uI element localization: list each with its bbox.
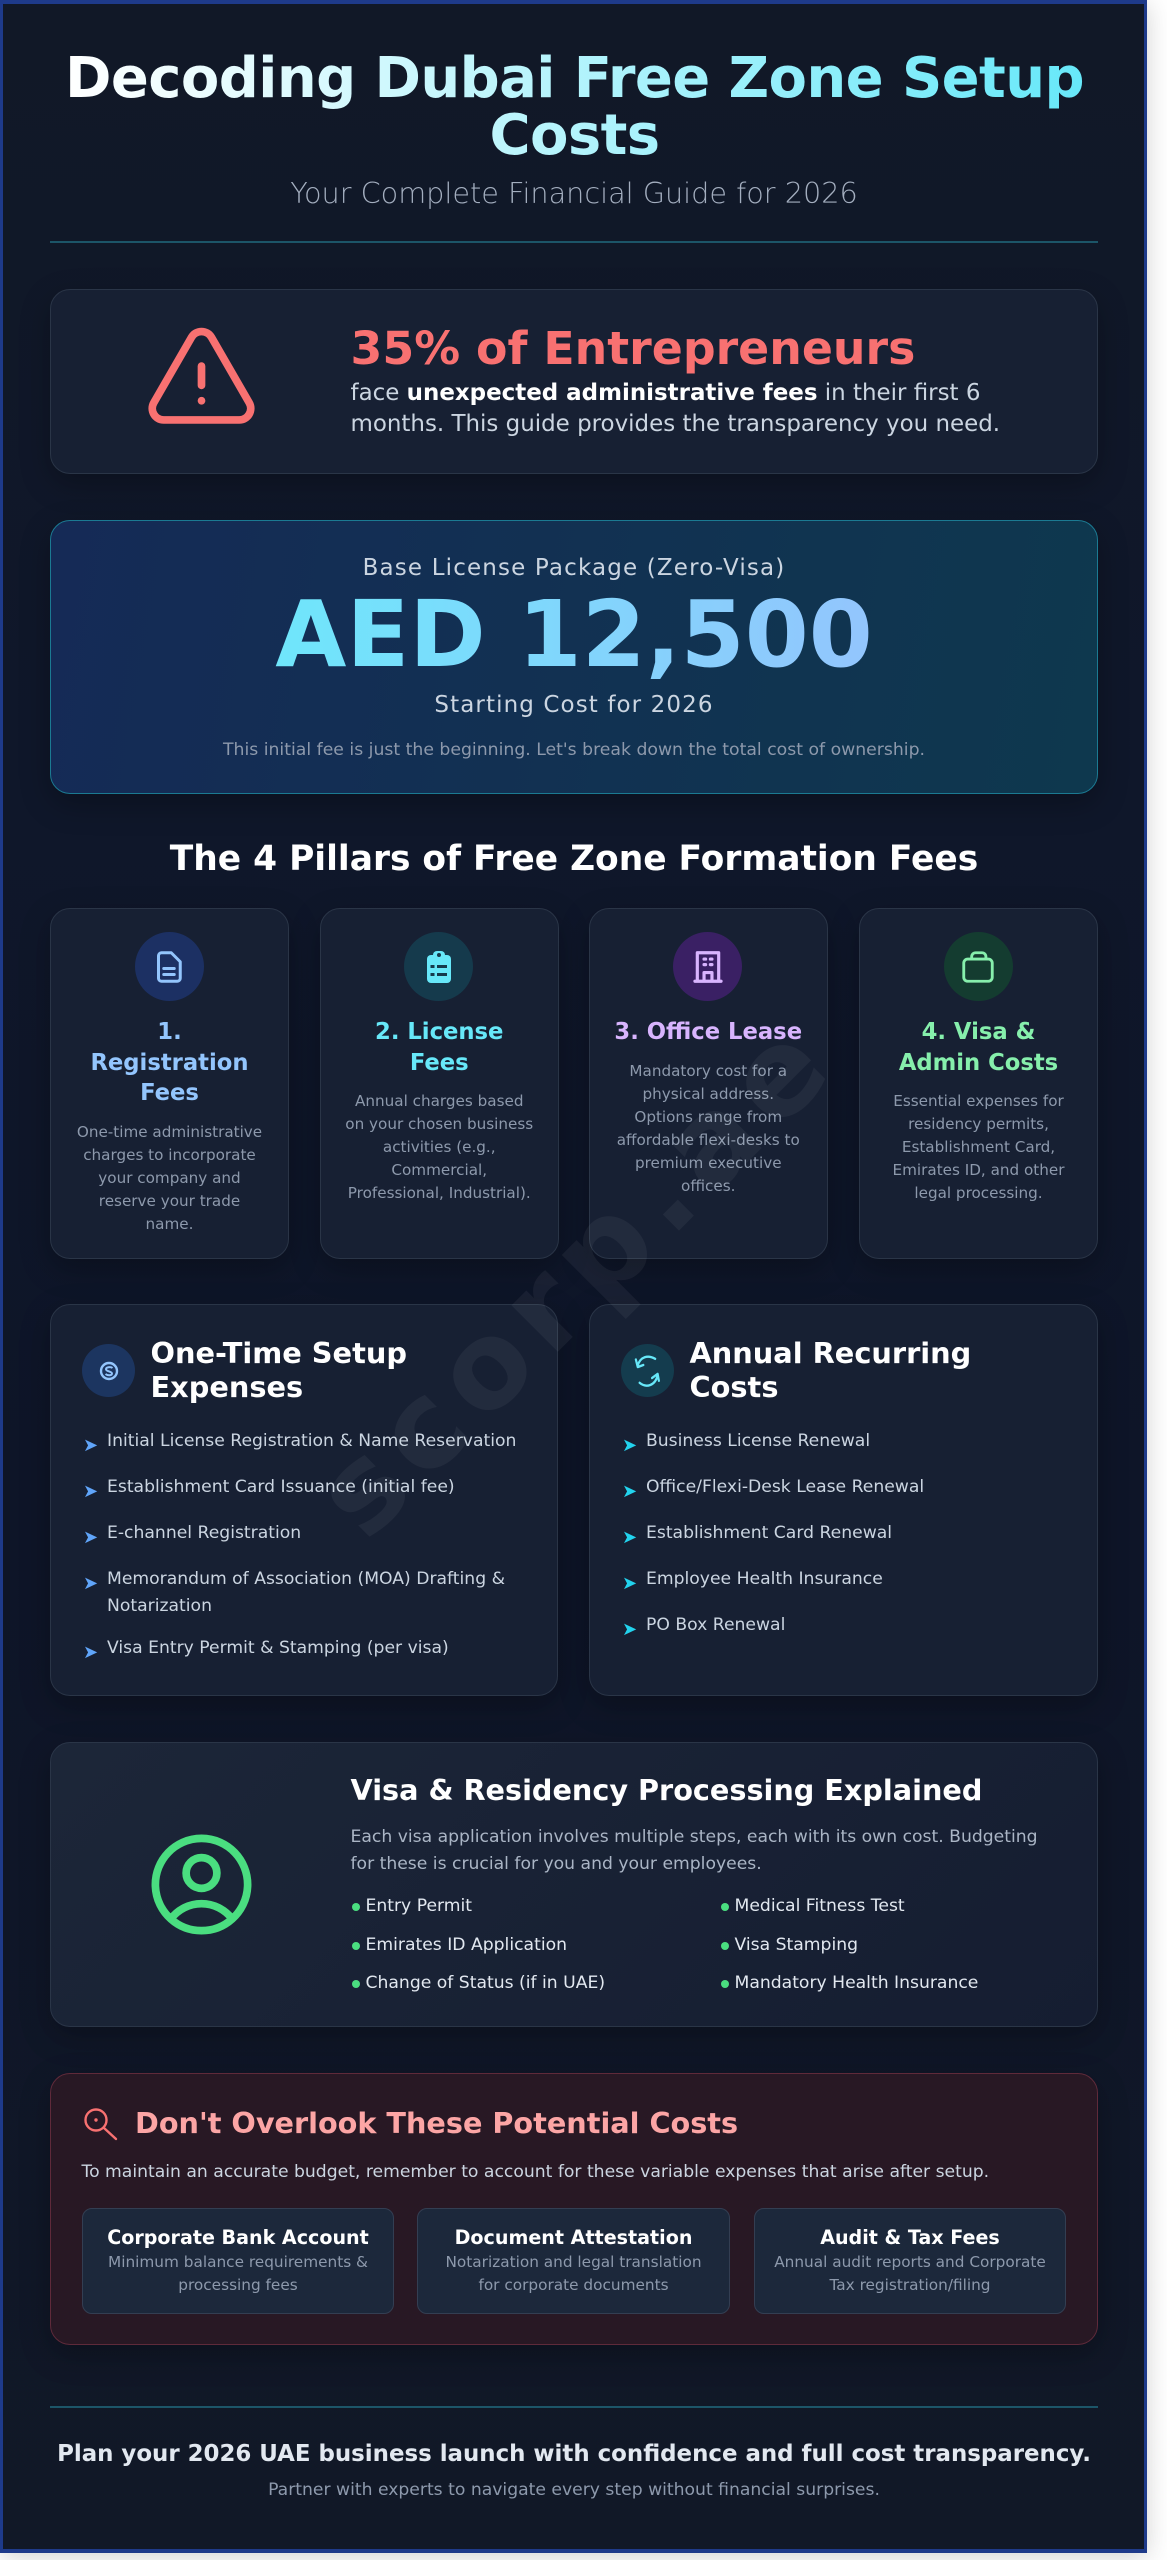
list: recurring items: ➤ [622, 1481, 637, 1502]
list: recurring items: Office/Flexi-Desk Lease Renewal [646, 1477, 924, 1497]
card: bank account: processing fees [178, 2276, 298, 2294]
list: one-time items: Visa Entry Permit & Stamping (per visa) [107, 1638, 449, 1658]
pillar text: Annual charges based [355, 1092, 523, 1110]
price caption: Starting Cost for 2026 [434, 692, 714, 718]
pillar text: Registration [90, 1050, 249, 1076]
list: one-time items: Memorandum of Association (MOA) Drafting & [107, 1569, 505, 1589]
pillar text: Professional, Industrial). [348, 1184, 531, 1202]
pillar text: Fees [410, 1050, 469, 1076]
pillar text: 3. Office Lease [614, 1019, 802, 1045]
icon: warning triangle [148, 328, 255, 424]
pillar text: your company and [98, 1169, 241, 1187]
icon: dollar coin [82, 1344, 135, 1397]
heading: Costs [690, 1370, 778, 1404]
panel: visa and residency [50, 1742, 1098, 2027]
pillar text: offices. [681, 1177, 735, 1195]
heading: Visa & Residency Processing Explained [350, 1773, 982, 1807]
list: one-time items: E-channel Registration [107, 1523, 301, 1543]
list: one-time items: ➤ [83, 1527, 98, 1548]
list: visa steps: Mandatory Health Insurance [734, 1973, 978, 1993]
card: audit and tax: Audit & Tax Fees [820, 2226, 1000, 2249]
card: audit and tax [754, 2208, 1066, 2314]
pillar text: physical address. [642, 1085, 774, 1103]
pillar text: 4. Visa & [922, 1019, 1035, 1045]
package label: Base License Package (Zero-Visa) [363, 555, 785, 581]
list: visa steps: Entry Permit [366, 1896, 472, 1916]
list: one-time items: ➤ [83, 1435, 98, 1456]
list: recurring items: ➤ [622, 1527, 637, 1548]
list: one-time items [83, 1431, 516, 1663]
list: recurring items: ➤ [622, 1435, 637, 1456]
pillar text: Commercial, [391, 1161, 487, 1179]
list: recurring items: ➤ [622, 1573, 637, 1594]
note: This initial fee is just the beginning. Let's break down the total cost of ownership. [223, 740, 925, 760]
list: recurring items: Business License Renewal [646, 1431, 870, 1451]
heading [150, 1336, 407, 1404]
icon: document [134, 932, 204, 1001]
paragraph: for these is crucial for you and your employees. [350, 1854, 762, 1874]
paragraph: Each visa application involves multiple steps, each with its own cost. Budgeting [350, 1827, 1038, 1847]
card: bank account: Corporate Bank Account [107, 2226, 369, 2249]
heading: Don't Overlook These Potential Costs [135, 2106, 738, 2140]
list: one-time items: Notarization [107, 1596, 212, 1616]
card: attestation: Document Attestation [455, 2226, 692, 2249]
pillar text: name. [146, 1215, 193, 1233]
card: bank account [82, 2208, 394, 2314]
card: attestation: for corporate documents [478, 2276, 669, 2294]
price: AED 12,500 [275, 581, 873, 688]
watermark: scorp.ae [288, 989, 863, 1564]
pillar text: Admin Costs [899, 1050, 1058, 1076]
list: one-time items: ➤ [83, 1642, 98, 1663]
panel: pillar 1 registration [50, 908, 289, 1259]
icon: clipboard [404, 932, 473, 1001]
pillar text: 2. License [375, 1019, 503, 1045]
pillar text: Establishment Card, [902, 1138, 1055, 1156]
pillar text: 1. [157, 1019, 182, 1045]
pillar text: residency permits, [908, 1115, 1049, 1133]
pillar text: Mandatory cost for a [629, 1062, 787, 1080]
pillar text: premium executive [635, 1154, 782, 1172]
panel: pillar 4 visa [859, 908, 1098, 1259]
pillar text: Emirates ID, and other [893, 1161, 1064, 1179]
alert text: face unexpected administrative fees in their first 6 [350, 380, 980, 406]
pillar text [893, 1019, 1064, 1202]
list: recurring items: ➤ [622, 1619, 637, 1640]
list: recurring items: Establishment Card Renewal [646, 1523, 892, 1543]
pillar text: Essential expenses for [893, 1092, 1064, 1110]
alert heading: 35% of Entrepreneurs [350, 321, 915, 375]
title: Decoding Dubai Free Zone Setup [65, 46, 1084, 111]
pillar text [614, 1019, 802, 1195]
pillar text: One-time administrative [77, 1123, 262, 1141]
pillar text: charges to incorporate [83, 1146, 256, 1164]
panel: annual recurring costs [589, 1304, 1098, 1696]
heading: One-Time Setup [150, 1336, 407, 1370]
list: visa steps: Visa Stamping [734, 1935, 858, 1955]
pillar text: reserve your trade [99, 1192, 240, 1210]
list: one-time items: Initial License Registration & Name Reservation [107, 1431, 516, 1451]
card: attestation: Notarization and legal translation [445, 2252, 702, 2270]
title: Costs [489, 103, 660, 168]
list: one-time items: Establishment Card Issuance (initial fee) [107, 1477, 455, 1497]
pillar text: Fees [140, 1080, 199, 1106]
alert text: months. This guide provides the transparency you need. [350, 411, 1000, 437]
icon: refresh [621, 1344, 674, 1397]
list: one-time items: ➤ [83, 1573, 98, 1594]
pillar text: legal processing. [914, 1184, 1043, 1202]
list: visa steps: Change of Status (if in UAE) [366, 1973, 605, 1993]
list: recurring items: PO Box Renewal [646, 1615, 785, 1635]
list: visa steps [352, 1896, 978, 1993]
card: bank account: Minimum balance requirements & [108, 2252, 368, 2270]
panel: alert statistic [50, 289, 1098, 474]
list: recurring items: Employee Health Insurance [646, 1569, 883, 1589]
card: audit and tax: Tax registration/filing [829, 2276, 991, 2294]
subtitle: Your Complete Financial Guide for 2026 [290, 176, 858, 210]
panel: potential costs [50, 2073, 1098, 2345]
list: visa steps: Medical Fitness Test [734, 1896, 905, 1916]
pillar text [345, 1019, 533, 1202]
pillar text: on your chosen business [345, 1115, 533, 1133]
icon: user circle [152, 1834, 252, 1934]
paragraph [350, 1827, 1038, 1874]
card: audit and tax: Annual audit reports and Corporate [774, 2252, 1046, 2270]
alert text [350, 380, 1000, 437]
icon: briefcase [944, 932, 1012, 1001]
icon: magnifier [84, 2108, 118, 2140]
pillar text [77, 1019, 262, 1233]
paragraph: To maintain an accurate budget, remember to account for these variable expenses that arise after setup. [82, 2162, 989, 2182]
section heading: pillars: The 4 Pillars of Free Zone Formation Fees [170, 839, 978, 879]
list: recurring items [622, 1431, 924, 1640]
list: one-time items: ➤ [83, 1481, 98, 1502]
panel: one-time expenses [50, 1304, 558, 1696]
heading [690, 1336, 971, 1404]
footer note: Partner with experts to navigate every step without financial surprises. [268, 2480, 880, 2500]
card: attestation [417, 2208, 730, 2314]
title [65, 46, 1084, 168]
list: visa steps: Emirates ID Application [366, 1935, 567, 1955]
icon: building [673, 932, 742, 1001]
pillar text: Options range from [634, 1108, 782, 1126]
panel: base license package [50, 520, 1098, 794]
panel: pillar 2 license [320, 908, 558, 1259]
panel: pillar 3 office [589, 908, 828, 1259]
heading: Expenses [150, 1370, 303, 1404]
heading: Annual Recurring [690, 1336, 971, 1370]
pillar text: affordable flexi-desks to [617, 1131, 800, 1149]
footer headline: Plan your 2026 UAE business launch with confidence and full cost transparency. [57, 2440, 1091, 2466]
pillar text: activities (e.g., [383, 1138, 496, 1156]
